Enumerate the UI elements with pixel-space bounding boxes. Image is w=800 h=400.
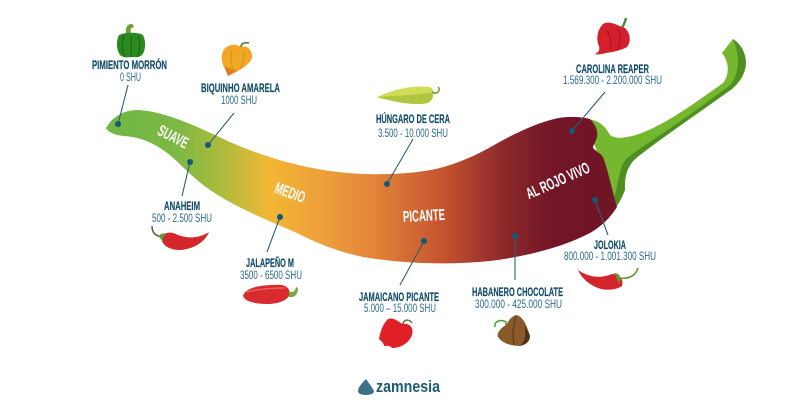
label: biquinho amarela: BIQUINHO AMARELA xyxy=(201,81,280,95)
label: húngaro de cera: HÚNGARO DE CERA xyxy=(376,111,450,126)
label: biquinho amarela: 1000 SHU xyxy=(221,93,257,107)
icon: carolina reaper pepper xyxy=(595,18,630,54)
label: pimiento morrón: 0 SHU xyxy=(120,70,141,84)
label: habanero chocolate: HABANERO CHOCOLATE xyxy=(472,285,563,299)
icon: jolokia pepper xyxy=(578,268,638,290)
zone label: suave: SUAVE xyxy=(155,121,192,152)
marker: biquinho amarela xyxy=(205,113,234,148)
label: anaheim: 500 - 2.500 SHU xyxy=(152,211,212,225)
label: anaheim xyxy=(152,199,212,225)
marker: anaheim xyxy=(182,159,193,196)
label: carolina reaper xyxy=(563,62,662,87)
marker: carolina reaper xyxy=(569,92,605,134)
marker: jolokia xyxy=(592,197,608,235)
label: jamaicano picante xyxy=(359,290,439,315)
label: jalapeño m: 3500 - 6500 SHU xyxy=(240,268,302,282)
zone label: medio: MEDIO xyxy=(272,179,308,206)
label: pimiento morrón xyxy=(92,57,167,84)
chili stem and calyx xyxy=(585,39,746,207)
marker: jamaicano picante xyxy=(400,238,427,285)
label: húngaro de cera: 3.500 - 10.000 SHU xyxy=(378,126,448,140)
zone label: al rojo vivo: AL ROJO VIVO xyxy=(523,158,593,203)
label: jalapeño m: JALAPEÑO M xyxy=(246,255,294,270)
icon: jalapeño pepper xyxy=(243,285,298,304)
label: carolina reaper: 1.569.300 - 2.200.000 SHU xyxy=(563,73,662,87)
label: biquinho amarela xyxy=(201,81,280,107)
label: jolokia xyxy=(564,238,656,263)
label: jolokia: JOLOKIA xyxy=(594,238,626,252)
chili body gradient xyxy=(106,110,617,263)
label: habanero chocolate: 300.000 - 425.000 SHU xyxy=(475,297,562,311)
logo: zamnesia xyxy=(358,377,440,396)
label: anaheim: ANAHEIM xyxy=(164,199,200,213)
marker: habanero chocolate xyxy=(512,233,518,280)
icon: yellow biquinho pepper xyxy=(222,43,252,76)
marker: jalapeño m xyxy=(267,214,283,252)
label: carolina reaper: CAROLINA REAPER xyxy=(576,62,649,76)
label: jamaicano picante: JAMAICANO PICANTE xyxy=(359,290,439,304)
icon: anaheim pepper xyxy=(152,226,209,250)
label: pimiento morrón: PIMIENTO MORRÓN xyxy=(92,57,167,72)
marker: pimiento morrón xyxy=(115,85,128,127)
icon: jamaican hot pepper xyxy=(379,319,413,348)
zone label: picante: PICANTE xyxy=(402,205,446,226)
label: jalapeño m xyxy=(240,255,302,282)
marker: húngaro de cera xyxy=(384,139,413,187)
label: jamaicano picante: 5.000 – 15.000 SHU xyxy=(364,301,436,315)
icon: chocolate habanero pepper xyxy=(495,315,530,346)
icon: hungarian wax pepper xyxy=(377,87,439,104)
label: jolokia: 800.000 - 1.001.300 SHU xyxy=(564,249,656,263)
logo: zamnesia: zamnesia xyxy=(376,377,440,396)
icon: green bell pepper xyxy=(117,24,145,57)
label: habanero chocolate xyxy=(472,285,563,311)
label: húngaro de cera xyxy=(376,111,450,140)
